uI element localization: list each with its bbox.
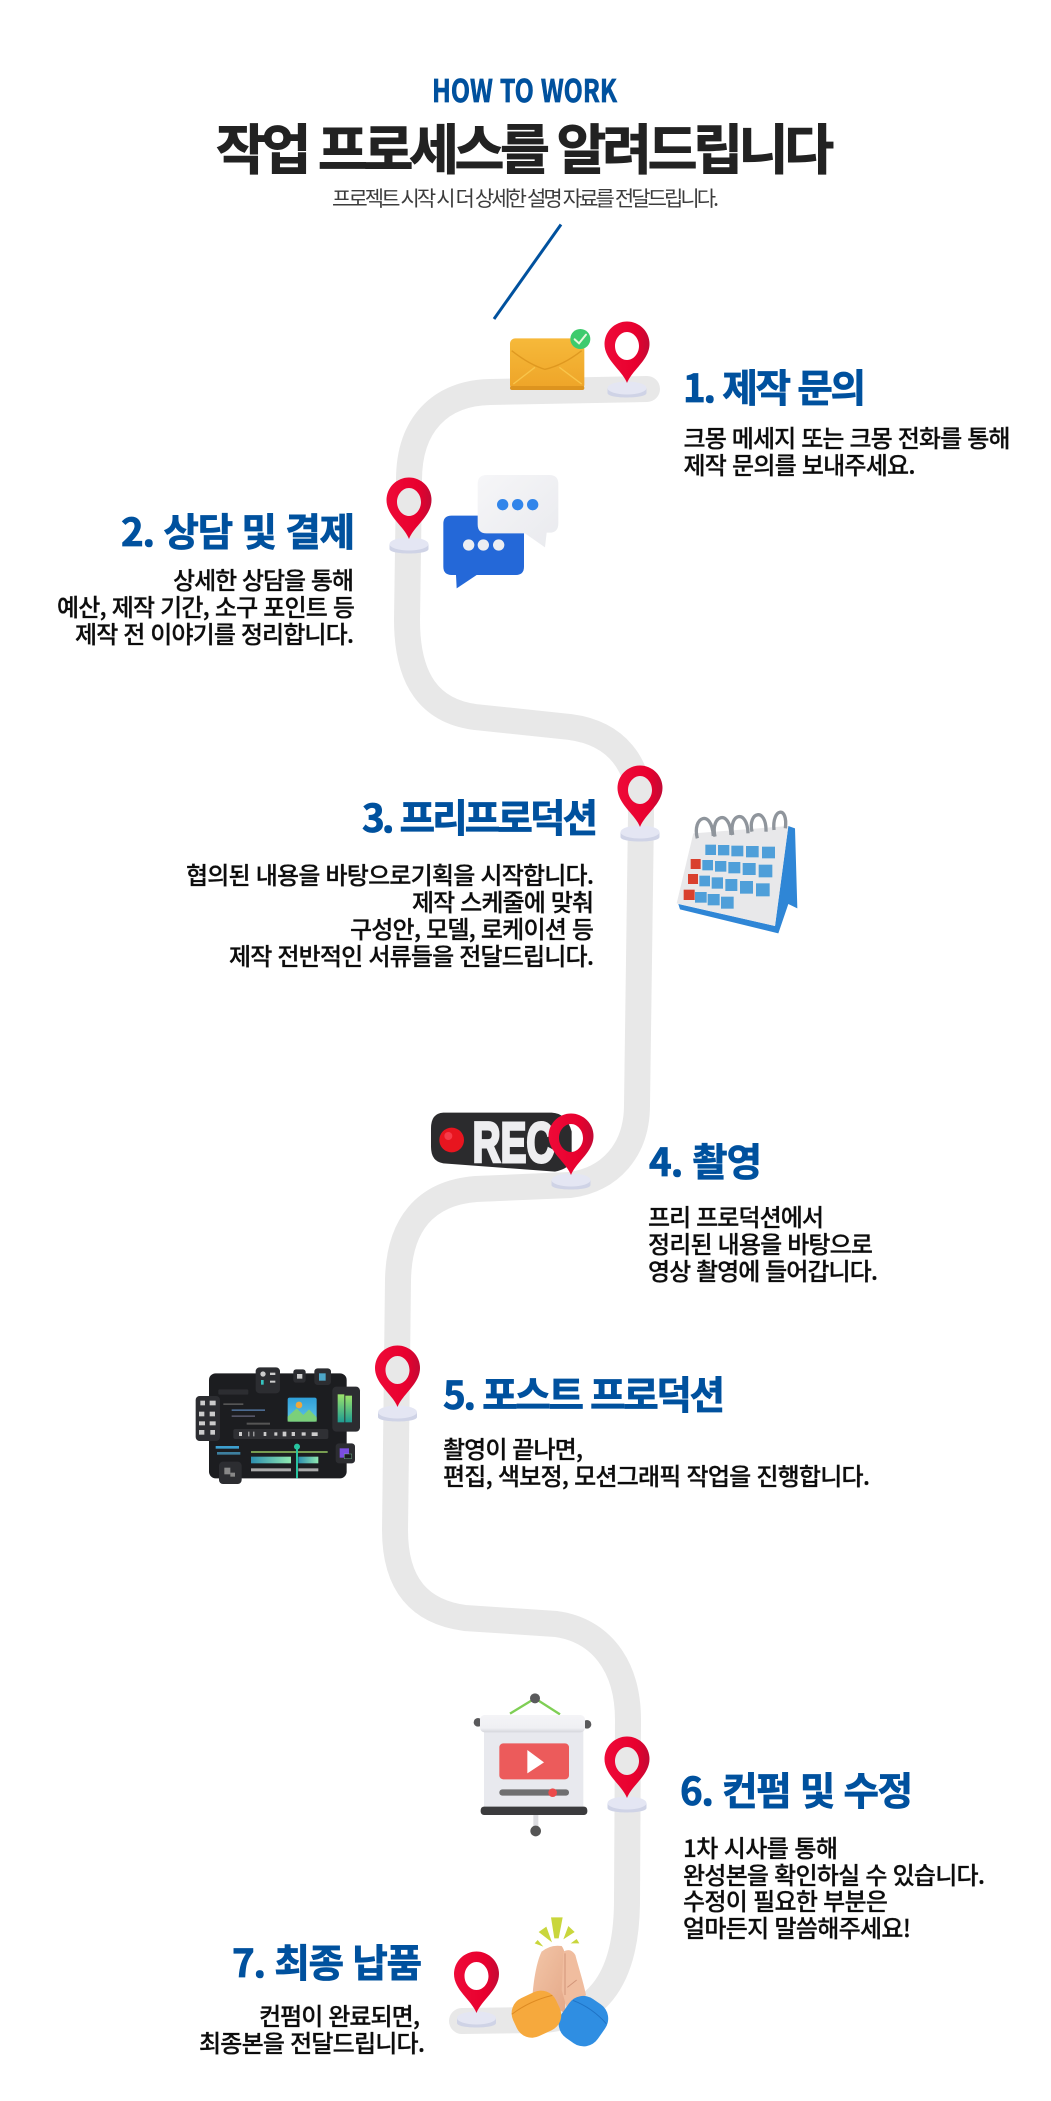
- step 7 panel: [199, 1917, 615, 2059]
- step 1 text: [684, 419, 1010, 481]
- step 1 heading: 1. 제작 문의: [683, 358, 866, 414]
- icon: map pin 7: [454, 1952, 499, 2028]
- step 6 text: 얼마든지 말씀해주세요!: [683, 1909, 911, 1944]
- step 7 text: [199, 1997, 425, 2059]
- step 2 text: 예산, 제작 기간, 소구 포인트 등: [57, 588, 355, 623]
- step 4 text: [648, 1198, 878, 1287]
- icon: map pin 1: [604, 322, 650, 398]
- step 4 text: 프리 프로덕션에서: [648, 1198, 824, 1233]
- step 4 text: 영상 촬영에 들어갑니다.: [648, 1252, 878, 1287]
- step 3 panel: [186, 766, 797, 972]
- step 5 text: 촬영이 끝나면,: [443, 1430, 583, 1465]
- step 4 panel: [431, 1112, 878, 1287]
- step 3 text: [186, 856, 594, 972]
- icon: desk calendar: [677, 812, 797, 933]
- title: 작업 프로세스를 알려드립니다: [216, 106, 834, 185]
- step 4 text: 정리된 내용을 바탕으로: [648, 1225, 873, 1260]
- icon: chat bubbles: [443, 475, 558, 588]
- icon: presentation screen with play button: [474, 1693, 591, 1836]
- step 6 heading: 6. 컨펌 및 수정: [680, 1761, 913, 1817]
- step 3 text: 협의된 내용을 바탕으로기획을 시작합니다.: [186, 856, 594, 891]
- step 6 panel: [474, 1693, 985, 1944]
- step 1 text: 제작 문의를 보내주세요.: [684, 446, 916, 481]
- intro text: 프로젝트 시작 시 더 상세한 설명 자료를 전달드립니다.: [332, 183, 719, 213]
- step 3 text: 제작 스케줄에 맞춰: [412, 883, 594, 918]
- step 5 text: [443, 1430, 870, 1492]
- subtitle: HOW TO WORK: HOW TO WORK: [432, 66, 618, 111]
- step 7 heading: 7. 최종 납품: [232, 1933, 422, 1989]
- step 2 heading: 2. 상담 및 결제: [121, 502, 355, 558]
- icon: map pin 6: [604, 1736, 650, 1812]
- icon: map pin 4: [548, 1114, 594, 1190]
- winding road path: [395, 389, 647, 2021]
- step 7 text: 컨펌이 완료되면,: [259, 1997, 420, 2032]
- step 5 panel: [196, 1346, 870, 1492]
- step 3 heading: 3. 프리프로덕션: [362, 788, 598, 844]
- icon: map pin 5: [375, 1346, 420, 1422]
- step 1 panel: [510, 322, 1010, 481]
- step 3 text: 구성안, 모델, 로케이션 등: [350, 910, 594, 945]
- step 5 text: 편집, 색보정, 모션그래픽 작업을 진행합니다.: [443, 1457, 870, 1492]
- icon: map pin 3: [618, 766, 662, 842]
- step 6 text: 1차 시사를 통해: [683, 1829, 838, 1864]
- step 2 text: 상세한 상담을 통해: [173, 561, 354, 596]
- icon: video editor interface: [196, 1367, 360, 1484]
- step 4 heading: 4. 촬영: [649, 1132, 762, 1188]
- icon: high-five hands: [506, 1917, 615, 2053]
- diagonal accent line: [494, 224, 561, 319]
- step 7 text: 최종본을 전달드립니다.: [199, 2024, 425, 2059]
- step 2 text: [57, 561, 355, 650]
- step 6 text: 완성본을 확인하실 수 있습니다.: [683, 1856, 985, 1891]
- step 2 panel: [57, 475, 558, 650]
- step 1 text: 크몽 메세지 또는 크몽 전화를 통해: [684, 419, 1010, 454]
- icon: REC badge: REC: [473, 1112, 554, 1175]
- icon: map pin 2: [386, 478, 432, 554]
- icon: envelope: [510, 329, 590, 390]
- step 6 text: [683, 1829, 985, 1944]
- step 5 heading: 5. 포스트 프로덕션: [443, 1365, 725, 1421]
- step 2 text: 제작 전 이야기를 정리합니다.: [75, 615, 354, 650]
- step 3 text: 제작 전반적인 서류들을 전달드립니다.: [229, 937, 594, 972]
- step 6 text: 수정이 필요한 부분은: [683, 1882, 888, 1917]
- icon: REC badge: [431, 1112, 572, 1175]
